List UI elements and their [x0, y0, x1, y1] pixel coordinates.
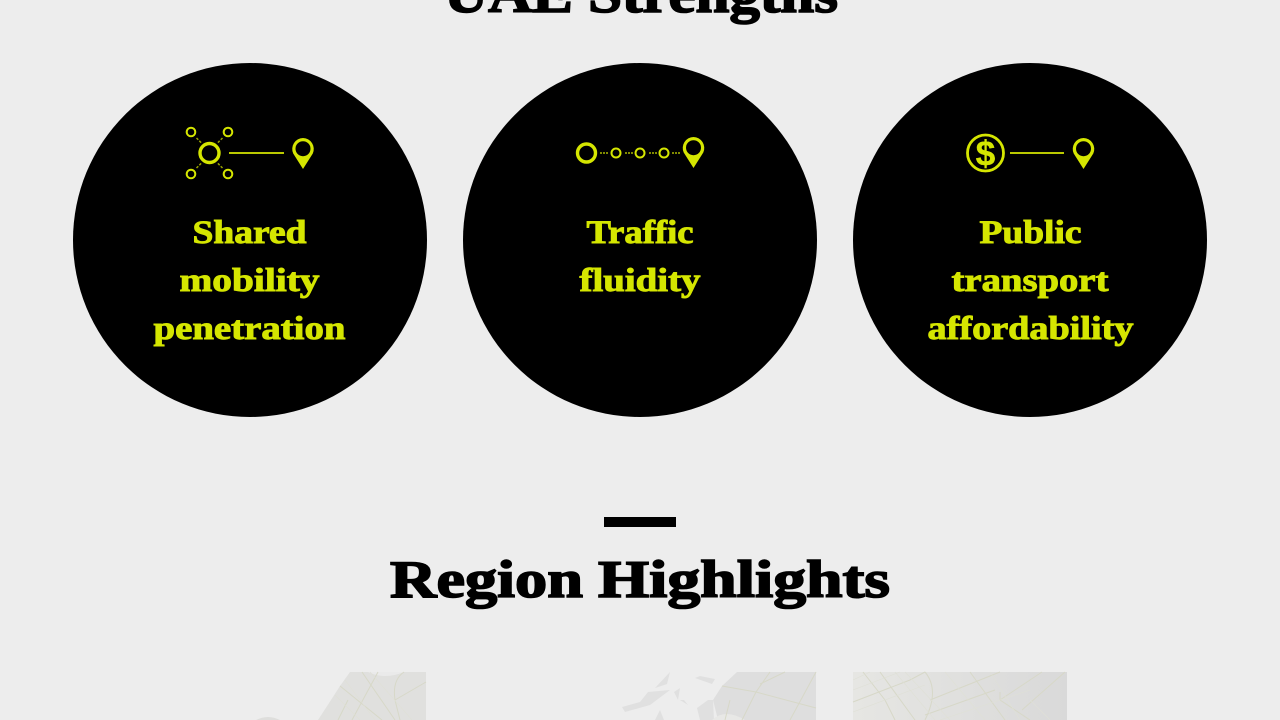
- label: Shared mobility penetration: mobility: [180, 263, 320, 299]
- label: Public transport affordability: Public: [980, 215, 1082, 251]
- icon: dollar coin to pin: [968, 134, 1094, 174]
- icon: traffic fluidity dotted route to pin: [578, 137, 704, 168]
- map: region two: [622, 672, 816, 720]
- label: Traffic fluidity: fluidity: [580, 263, 701, 299]
- panel: traffic fluidity: [463, 63, 817, 417]
- label: Traffic fluidity: [580, 215, 701, 299]
- heading: Region Highlights: [390, 551, 890, 609]
- label: Shared mobility penetration: Shared: [192, 215, 306, 251]
- label: Public transport affordability: affordability: [928, 311, 1134, 347]
- label: Traffic fluidity: Traffic: [586, 215, 694, 251]
- heading: Region Highlights: Highlights: [598, 551, 890, 609]
- panel: shared mobility penetration: [73, 63, 427, 417]
- label: Public transport affordability: transport: [952, 263, 1109, 299]
- label: Public transport affordability: [928, 215, 1134, 347]
- panel: public transport affordability: [853, 63, 1207, 417]
- map: region one: [256, 672, 426, 720]
- icon: shared mobility network to pin: [187, 128, 314, 178]
- label: Shared mobility penetration: penetration: [154, 311, 346, 347]
- map: region three: [853, 672, 1067, 720]
- label: Shared mobility penetration: [154, 215, 346, 347]
- icon: dollar coin to pin: $: [976, 134, 995, 174]
- heading: Region Highlights: Region: [390, 551, 583, 609]
- heading rule: [604, 517, 676, 527]
